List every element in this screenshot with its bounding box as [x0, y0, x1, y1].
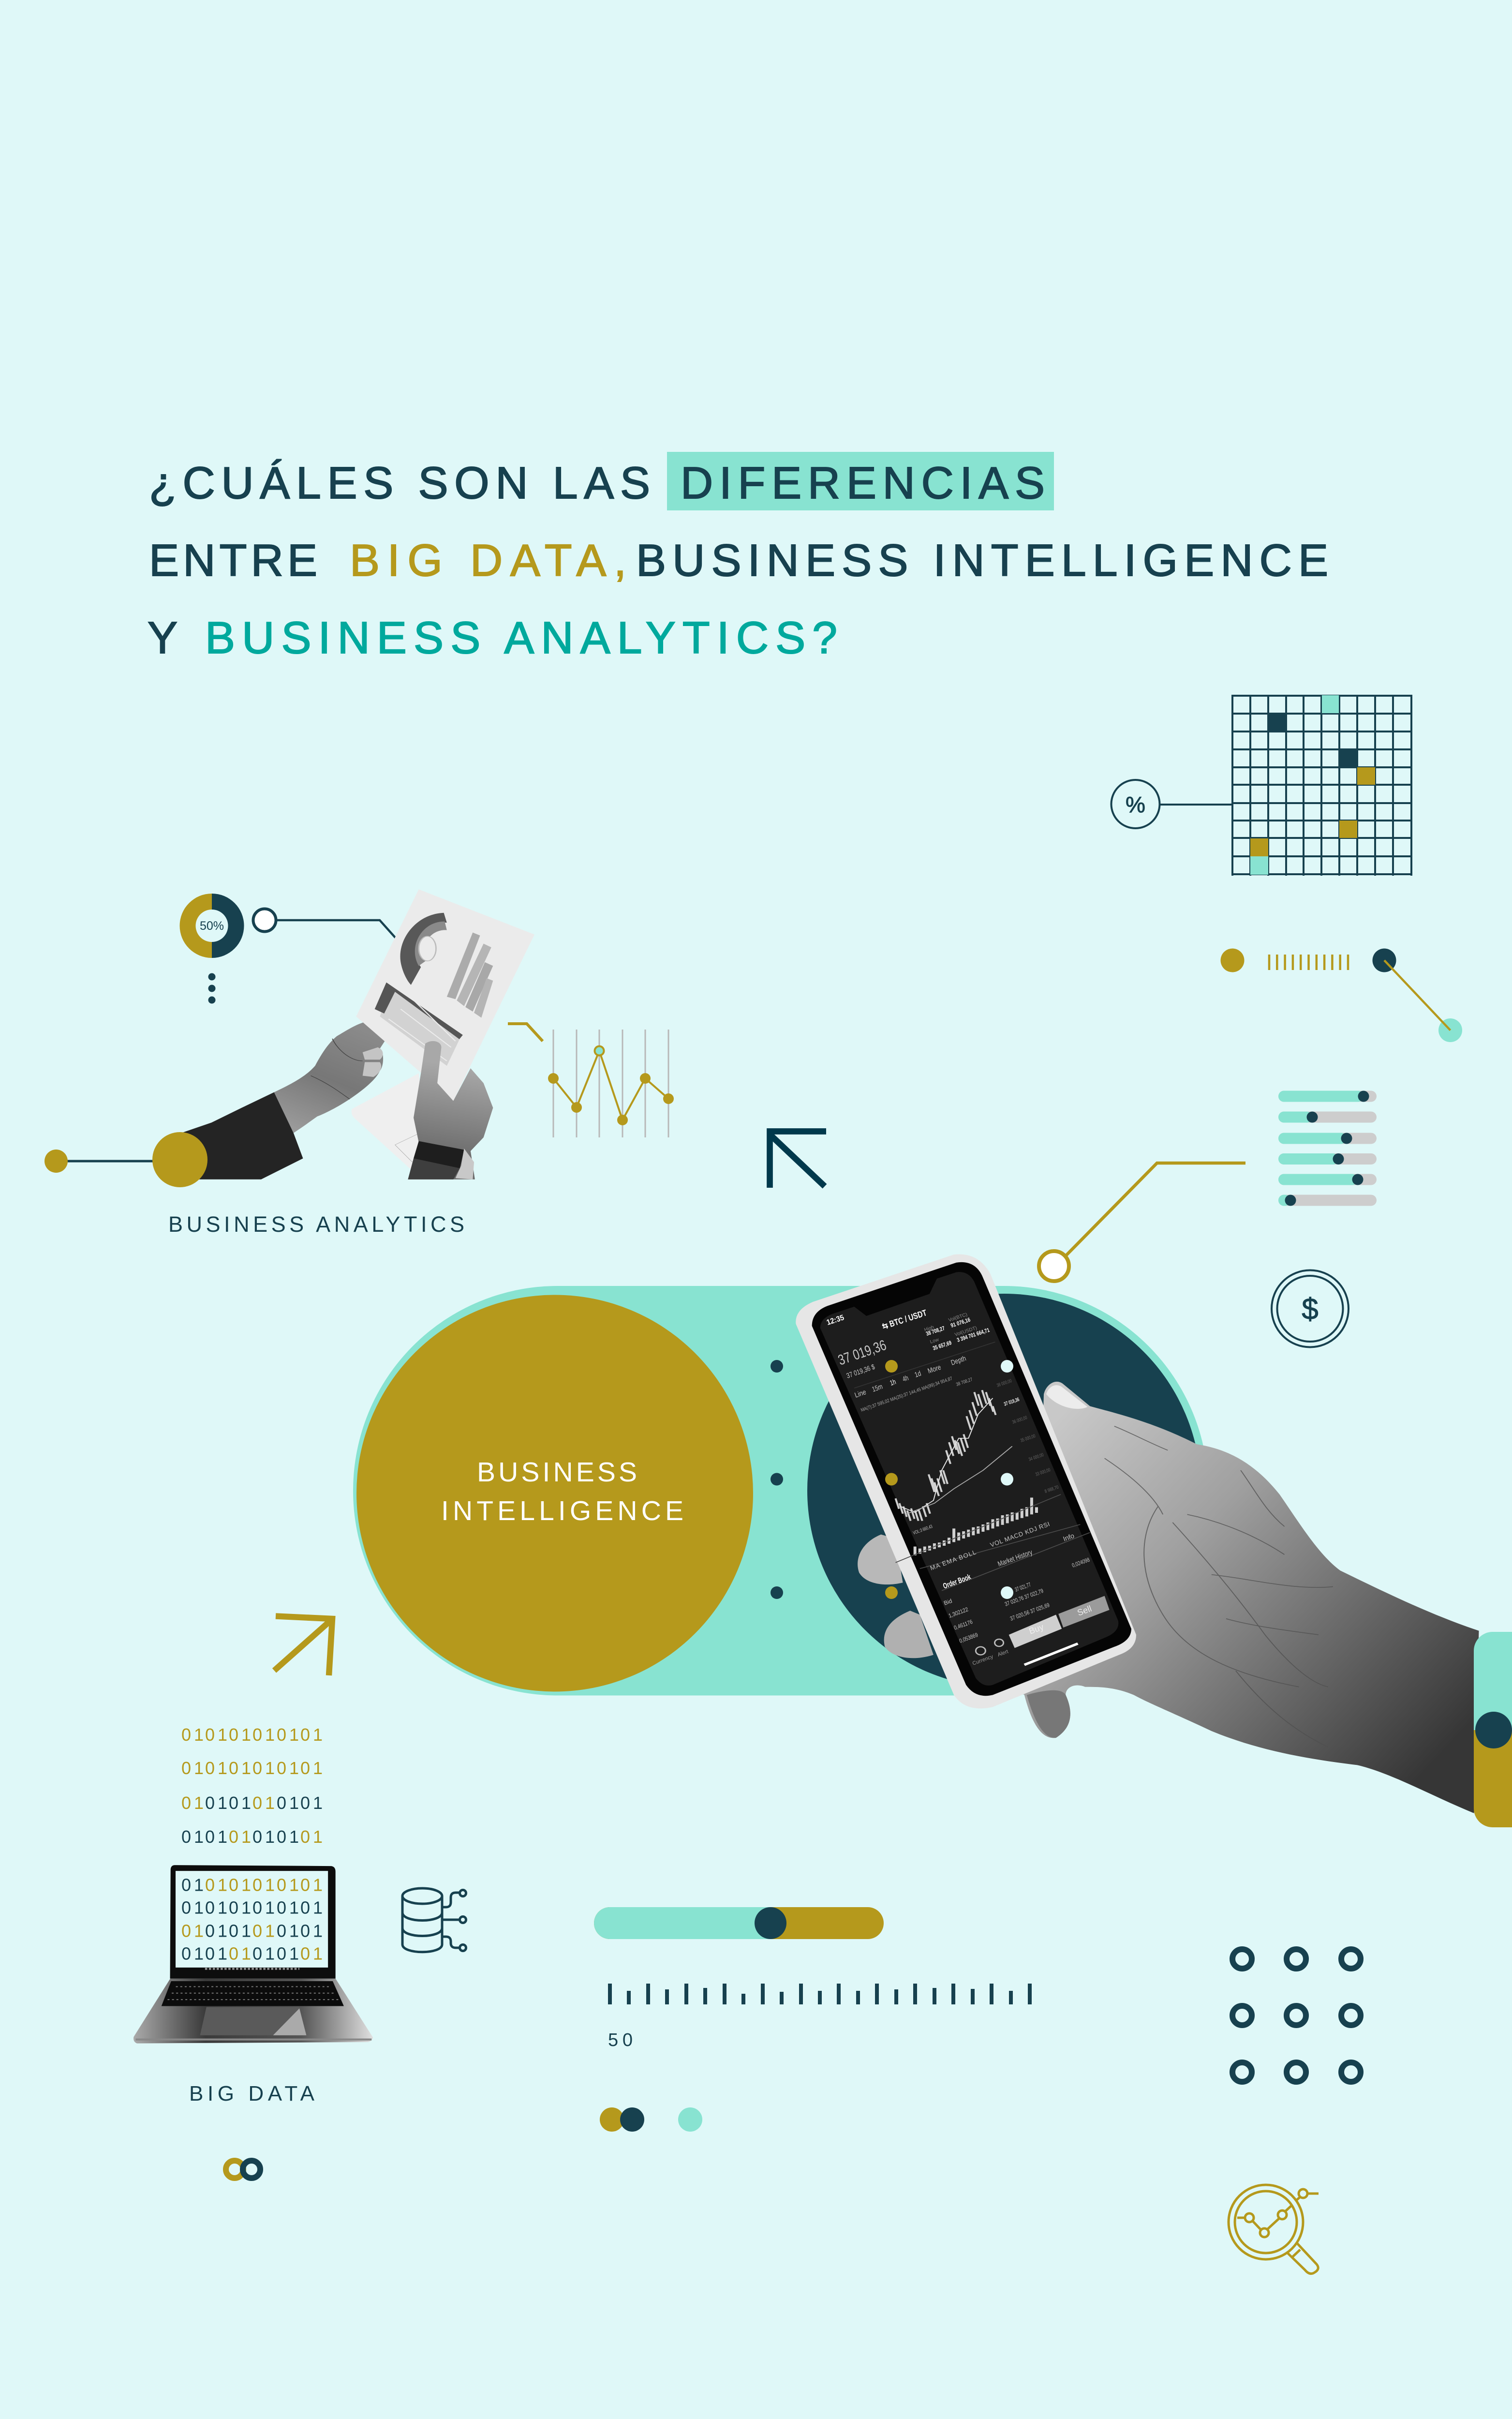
- phone screen text: Vol(BTC): [948, 1312, 968, 1323]
- phone screen text: VOL MACD KDJ RSI: [989, 1520, 1051, 1549]
- business intelligence label: INTELLIGENCE: [441, 1495, 683, 1526]
- binary rows on laptop screen: 010101010101: [181, 1897, 323, 1918]
- fingers: [858, 1535, 903, 1584]
- phone screen text: Depth: [950, 1354, 967, 1367]
- palm creases: [1105, 1426, 1333, 1747]
- palm: [993, 1382, 1479, 1813]
- binary rows on laptop screen: 0101: [205, 1921, 251, 1941]
- phone screen text: [826, 1308, 1093, 1667]
- keyboard: [162, 1981, 344, 2006]
- phone screen text: More: [927, 1363, 942, 1375]
- binary rows: 01: [229, 1827, 251, 1847]
- title: BIG DATA,: [350, 535, 626, 585]
- buy button: [1009, 1615, 1062, 1648]
- phone screen text: 35 657,69: [932, 1339, 952, 1352]
- phone screen text: Alert: [997, 1649, 1009, 1658]
- donut 50 percent: [180, 894, 244, 958]
- central pill: [353, 1286, 1208, 1695]
- finger tip shading: [1027, 1690, 1070, 1738]
- binary rows: 0101: [181, 1827, 227, 1847]
- right edge pill: [1474, 1632, 1512, 1827]
- title: ¿CUÁLES SON LAS: [149, 458, 650, 508]
- phone screen text: MA EMA BOLL: [929, 1549, 977, 1572]
- ring node with line to report: [253, 909, 396, 939]
- sell button: [1058, 1596, 1110, 1628]
- price chart: [854, 1342, 1090, 1665]
- phone screen bezel: [812, 1262, 1131, 1696]
- business intelligence label: BUSINESS: [477, 1457, 637, 1488]
- binary rows on laptop screen: 0101: [277, 1921, 323, 1941]
- trackpad: [200, 2007, 306, 2035]
- connector dots and gold ticks: [1221, 948, 1462, 1042]
- phone screen text: 37 020,56 37 025,69: [1009, 1601, 1051, 1622]
- binary rows on laptop screen: 01: [181, 1921, 204, 1941]
- phone screen text: 34 000,00: [1028, 1452, 1045, 1463]
- binary rows on laptop screen: 0101: [181, 1944, 227, 1964]
- bar chart on paper: [447, 933, 480, 999]
- label: business analytics: BUSINESS ANALYTICS: [168, 1212, 464, 1237]
- scale label 50: 50: [608, 2030, 633, 2050]
- photo: hands holding report: [181, 889, 534, 1180]
- phone screen text: Buy: [1028, 1622, 1045, 1636]
- percent circle: %: [1126, 792, 1145, 817]
- arrow: dark up-left: [770, 1131, 826, 1188]
- binary rows on laptop screen: 01: [229, 1944, 251, 1964]
- binary rows: 0101: [252, 1827, 299, 1847]
- phone screen text: 38 708,27: [955, 1377, 973, 1388]
- phone screen text: ⇆ BTC / USDT: [881, 1308, 928, 1331]
- dollar coin icon: [1272, 1270, 1349, 1347]
- phone screen text: Bid: [943, 1598, 953, 1607]
- legend dots: [600, 2107, 702, 2132]
- phone screen text: Line: [854, 1388, 867, 1400]
- binary rows: 01: [300, 1827, 323, 1847]
- gold ring node: [1039, 1251, 1069, 1281]
- binary rows: 0101: [205, 1793, 251, 1813]
- table on paper: [380, 987, 460, 1066]
- binary rows on laptop screen: [181, 1875, 323, 1964]
- phone screen text: VOL:3 660,43: [912, 1524, 934, 1536]
- binary rows: 0101: [277, 1793, 323, 1813]
- percent circle: [1112, 780, 1160, 828]
- phone screen text: Market History: [997, 1548, 1034, 1568]
- phone screen text: High: [924, 1325, 934, 1333]
- title: [148, 452, 1328, 663]
- phone screen text: 38 000,00: [996, 1378, 1013, 1389]
- phone screen text: 0,053869: [958, 1631, 979, 1644]
- dots over phone: [885, 1360, 1013, 1599]
- title: BUSINESS INTELLIGENCE: [636, 535, 1328, 585]
- phone screen text: 0,461176: [953, 1618, 974, 1631]
- phone screen text: 15m: [871, 1383, 884, 1394]
- phone screen text: 1h: [889, 1378, 897, 1388]
- left hand: [274, 1021, 386, 1133]
- phone screen text: 0,024098: [1071, 1556, 1091, 1569]
- phone screen text: 4h: [902, 1374, 910, 1384]
- phone screen text: 1d: [914, 1369, 922, 1379]
- binary rows on laptop screen: 01: [252, 1921, 275, 1941]
- lower wrist: [408, 1158, 460, 1180]
- phone screen text: 33 000,00: [1035, 1467, 1052, 1478]
- title: DIFERENCIAS: [681, 458, 1045, 508]
- hand holding phone: [796, 1254, 1479, 1813]
- binary rows on laptop screen: 01: [300, 1944, 323, 1964]
- phone screen text: Order Book: [942, 1573, 972, 1591]
- phone screen text: Currency: [972, 1654, 994, 1667]
- phone screen text: Low: [930, 1337, 940, 1345]
- phone screen text: 36 000,00: [1011, 1415, 1028, 1425]
- binary rows: [181, 1725, 323, 1847]
- gold line chart: [508, 1024, 674, 1137]
- phone screen text: 12:35: [826, 1314, 845, 1327]
- tablet: [352, 1073, 430, 1171]
- binary rows: 01: [252, 1793, 275, 1813]
- phone screen text: MA(7):37 595,02 MA(25):37 144,45 MA(99):34 954,87: [860, 1376, 953, 1413]
- grid chart with percent node: [1112, 695, 1412, 876]
- donut 50 percent: 50%: [200, 919, 224, 933]
- grid: [1231, 695, 1412, 876]
- thumb highlight: [1046, 1385, 1087, 1409]
- volume bars: [915, 1497, 1037, 1555]
- binary rows on laptop screen: 0101010101: [205, 1875, 323, 1895]
- laptop photo: [133, 1865, 373, 2044]
- big slider: [594, 1907, 884, 1939]
- gold connector left of photo: [44, 1132, 208, 1187]
- phone screen text: Vol(USDT): [954, 1326, 978, 1338]
- phone screen text: Info: [1062, 1532, 1075, 1543]
- gold connector to pill: [1066, 1163, 1245, 1256]
- slider list: [1278, 1090, 1377, 1206]
- phone screen text: 1,302122: [948, 1606, 969, 1619]
- right hand: [408, 1041, 493, 1180]
- phone screen text: Sell: [1076, 1604, 1093, 1618]
- title highlight box: [667, 452, 1054, 510]
- binary rows: 010101010101: [181, 1725, 323, 1745]
- binary rows: 01: [181, 1793, 204, 1813]
- dark circle: [807, 1294, 1201, 1687]
- fan chart: [400, 913, 447, 985]
- laptop base: [133, 1979, 373, 2044]
- phone screen text: 37 021,77: [1014, 1581, 1032, 1593]
- dark dots: [771, 1360, 783, 1599]
- lid: [170, 1865, 336, 1979]
- screen: [176, 1871, 328, 1968]
- label: big data: BIG DATA: [189, 2082, 315, 2105]
- binary rows on laptop screen: 01: [181, 1875, 204, 1895]
- vertical dots: [208, 973, 216, 1003]
- icon: database: [402, 1888, 466, 1952]
- left hand fingers: [363, 1047, 383, 1077]
- phone screen text: 91 076,16: [950, 1316, 971, 1329]
- phone screen text: 37 020,76 37 022,79: [1004, 1587, 1044, 1608]
- phone screen text: 8 988,70: [1044, 1485, 1060, 1494]
- binary rows: 010101010101: [181, 1758, 323, 1778]
- icon: magnifier with chart: [1229, 2185, 1319, 2274]
- paper: [356, 889, 534, 1101]
- home bar: [1024, 1643, 1078, 1665]
- title: ENTRE: [149, 535, 317, 585]
- phone screen text: 37 019,36: [836, 1337, 889, 1369]
- phone screen text: 3 394 701 664,71: [956, 1327, 991, 1344]
- business intelligence label: [441, 1457, 683, 1526]
- phone screen text: 35 000,00: [1020, 1433, 1037, 1444]
- arrow: gold up-right: [274, 1616, 332, 1675]
- tick scale: [610, 1984, 1030, 2004]
- phone screen text: 37 019,36 $: [845, 1363, 876, 1380]
- binary rows on laptop screen: 0101: [252, 1944, 299, 1964]
- ring grid: [1232, 1949, 1361, 2082]
- watch: [414, 1141, 464, 1168]
- gold circle: [356, 1295, 753, 1691]
- dollar coin icon: $: [1302, 1293, 1319, 1326]
- linked rings: [226, 2161, 260, 2178]
- sleeve: [181, 1092, 303, 1180]
- title: Y: [148, 612, 178, 663]
- phone screen text: 38 708,27: [925, 1325, 946, 1337]
- title: BUSINESS ANALYTICS?: [205, 612, 837, 663]
- phone screen text: 37 019,36: [1003, 1397, 1020, 1407]
- phone case: [796, 1254, 1136, 1708]
